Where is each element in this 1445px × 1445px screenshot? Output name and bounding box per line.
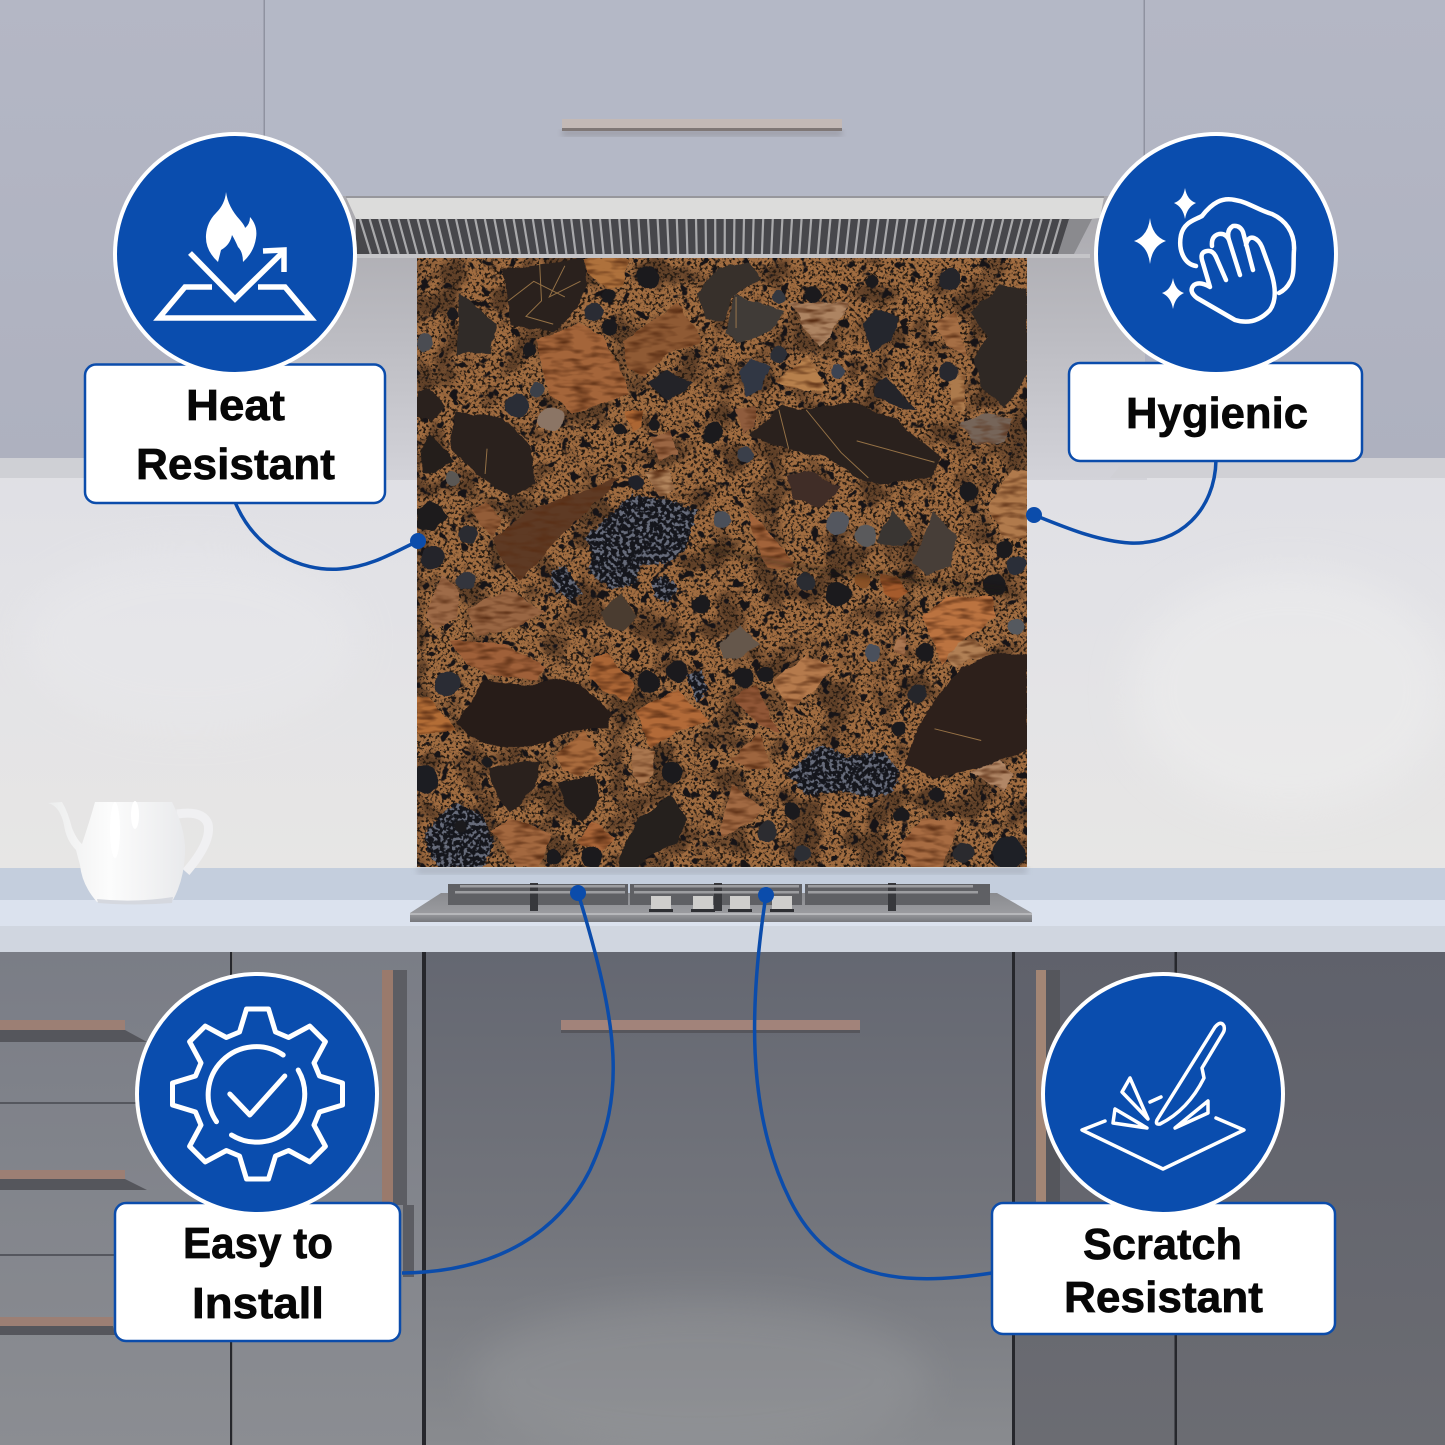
top cabinet handle (562, 119, 842, 136)
label box: Easy to (183, 1219, 333, 1268)
countertop (0, 867, 1445, 952)
icon badge: flame on surface (113, 132, 357, 376)
label box (85, 364, 385, 503)
cooktop hob (410, 883, 1032, 922)
wood-toned stones (417, 258, 1027, 868)
cabinet handles (0, 970, 1060, 1335)
fracture veins (485, 262, 981, 740)
crease shadow (700, 548, 1005, 592)
upper cabinets (0, 0, 1445, 478)
label box: Heat (186, 381, 285, 430)
connector: Heat Resistant to panel (235, 502, 426, 569)
connector: Easy to Install to panel (402, 885, 613, 1273)
label box: Resistant (1064, 1273, 1263, 1322)
dark stones (417, 258, 1027, 868)
icon badge: knife scratching surface (1041, 972, 1285, 1216)
extractor hood (346, 196, 1104, 258)
speckled black stones (425, 495, 899, 868)
label box: Scratch (1083, 1220, 1242, 1269)
connector: Hygienic to panel (1026, 460, 1216, 543)
feature: Easy to Install (115, 972, 400, 1341)
pebbles (412, 266, 1026, 870)
icon badge: gear with check (135, 972, 379, 1216)
feature: Scratch Resistant (992, 972, 1335, 1334)
label box: Install (192, 1279, 324, 1328)
connector: Scratch Resistant to panel (755, 887, 992, 1279)
marble splashback panel (412, 258, 1027, 870)
label box: Hygienic (1126, 389, 1308, 438)
label box: Resistant (136, 440, 335, 489)
icon badge: hand wiping (1094, 132, 1338, 376)
aggregate stones (412, 258, 1027, 870)
lower cabinets (0, 952, 1445, 1445)
feature: Hygienic (1069, 132, 1362, 461)
feature: Heat Resistant (85, 132, 385, 503)
label box (115, 1203, 400, 1341)
label box (1069, 363, 1362, 461)
white teapot (48, 801, 209, 904)
stone matrix (417, 258, 1027, 868)
wall (0, 258, 1445, 870)
label box (992, 1203, 1335, 1334)
